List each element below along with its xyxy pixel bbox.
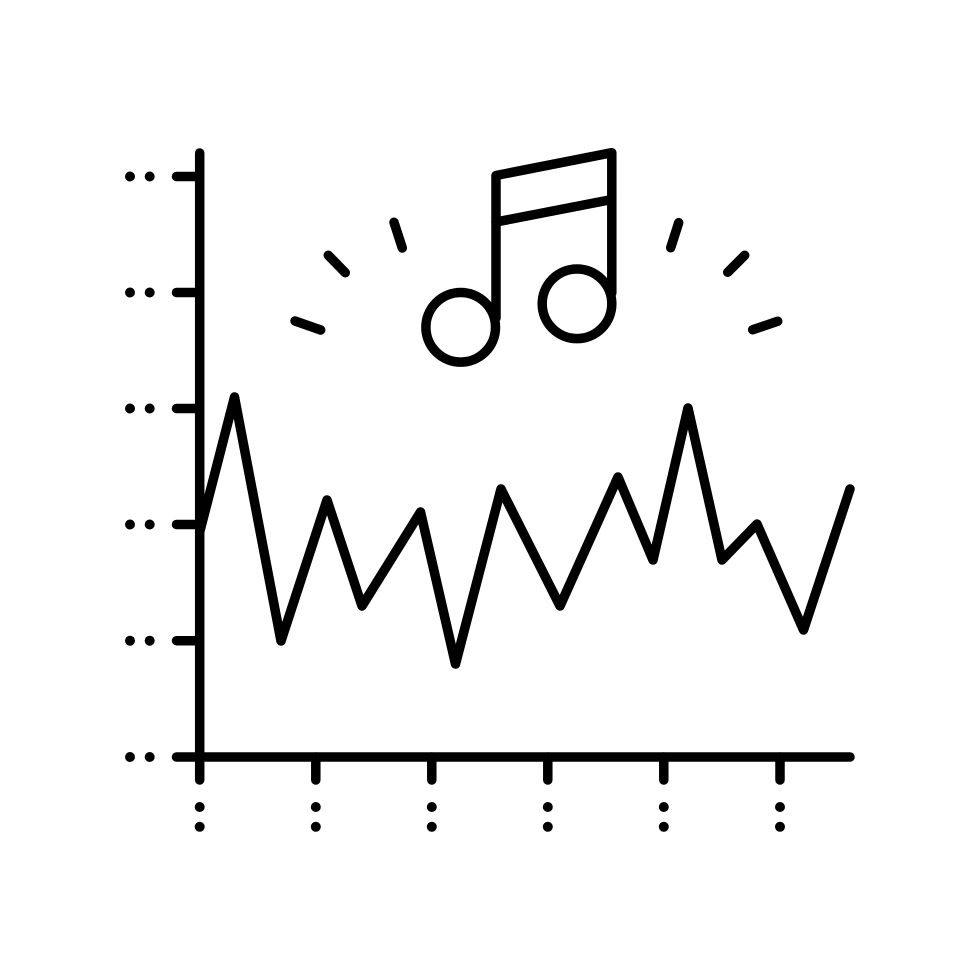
sound rays left (295, 222, 402, 330)
icon: music note (426, 153, 612, 362)
chart axes (176, 153, 850, 780)
sound wave line (200, 397, 850, 664)
sound rays right (671, 223, 778, 330)
x axis dotted labels (195, 802, 785, 832)
y axis tick marks (176, 176, 199, 641)
x axis tick marks (316, 757, 780, 780)
y axis dotted labels (125, 172, 155, 762)
